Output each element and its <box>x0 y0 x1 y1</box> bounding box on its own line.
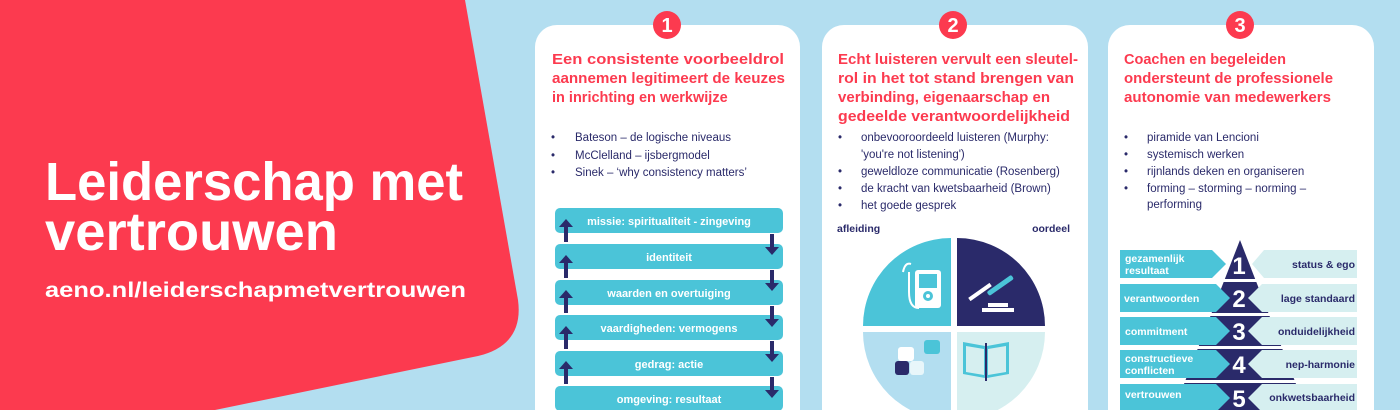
chart: Lencioni pyramid: onduidelijkheid <box>1278 326 1355 338</box>
chart: logical levels: gedrag: actie <box>635 359 703 371</box>
panel: card 1 <box>535 11 800 410</box>
heading 1: in inrichting en werkwijze <box>552 90 728 106</box>
heading 2: Echt luisteren vervult een sleutel- <box>838 52 1078 68</box>
chart: Lencioni pyramid: lage standaard <box>1281 293 1355 305</box>
bullets 1: Sinek – ‘why consistency matters’ <box>575 167 747 179</box>
number badge 3: 3 <box>1234 15 1246 37</box>
bullets 2: 'you're not listening') <box>861 149 965 161</box>
bullets 1: • <box>551 132 555 144</box>
number badge 2: 2 <box>947 15 959 37</box>
bullets 3: forming – storming – norming – <box>1147 183 1307 195</box>
bullets 2: het goede gesprek <box>861 200 957 212</box>
chart: Lencioni pyramid: status & ego <box>1292 259 1355 271</box>
chart: quadrant circle <box>863 238 1045 410</box>
bullets 3: systemisch werken <box>1147 149 1244 161</box>
chart: Lencioni pyramid <box>1120 240 1357 410</box>
chart: logical levels: missie: spiritualiteit - zingeving <box>587 216 751 228</box>
chart: Lencioni pyramid: commitment <box>1125 326 1188 338</box>
heading 2: verbinding, eigenaarschap en <box>838 90 1050 106</box>
chart: logical levels: waarden en overtuiging <box>606 288 731 300</box>
url: aeno.nl/leiderschapmetvertrouwen <box>45 279 466 302</box>
bullets 3: • <box>1124 183 1128 195</box>
chart: Lencioni pyramid: vertrouwen <box>1125 389 1182 401</box>
bullets 2: • <box>838 200 842 212</box>
chart: Lencioni pyramid: onkwetsbaarheid <box>1269 392 1355 404</box>
number badge 2 <box>939 11 967 39</box>
title <box>45 161 462 250</box>
chart: Lencioni pyramid: 1 <box>1232 253 1246 280</box>
bullets 2: • <box>838 183 842 195</box>
chart: Lencioni pyramid: constructieve <box>1125 353 1193 365</box>
bullets 3: • <box>1124 132 1128 144</box>
labels afleiding / oordeel <box>837 224 1070 234</box>
heading 2: gedeelde verantwoordelijkheid <box>838 109 1070 125</box>
number badge 3 <box>1226 11 1254 39</box>
bullets 1: Bateson – de logische niveaus <box>575 132 731 144</box>
chart: Lencioni pyramid: nep-harmonie <box>1286 359 1355 371</box>
bullets 3: performing <box>1147 199 1202 211</box>
chart: Lencioni pyramid: 3 <box>1232 319 1246 346</box>
chart: Lencioni pyramid: verantwoorden <box>1124 293 1199 305</box>
bullets 2 <box>838 132 1060 212</box>
heading 3 <box>1124 52 1333 106</box>
bullets 1: McClelland – ijsbergmodel <box>575 150 710 162</box>
heading 3: ondersteunt de professionele <box>1124 71 1333 87</box>
chart: Lencioni pyramid: conflicten <box>1125 365 1175 377</box>
title: vertrouwen <box>45 202 338 262</box>
bullets 3 <box>1124 132 1307 211</box>
bullets 1 <box>551 132 747 179</box>
bullets 1: • <box>551 150 555 162</box>
bullets 1: • <box>551 167 555 179</box>
chart: Lencioni pyramid: resultaat <box>1125 265 1169 277</box>
heading 2: rol in het tot stand brengen van <box>838 71 1074 87</box>
chart: Lencioni pyramid: gezamenlijk <box>1125 253 1185 265</box>
bullets 3: • <box>1124 166 1128 178</box>
icon: open book <box>963 342 1009 381</box>
chart: logical levels <box>555 208 783 410</box>
bullets 3: rijnlands deken en organiseren <box>1147 166 1304 178</box>
bullets 2: • <box>838 166 842 178</box>
bullets 2: geweldloze communicatie (Rosenberg) <box>861 166 1060 178</box>
title: Leiderschap met <box>45 152 463 212</box>
bullets 2: • <box>838 132 842 144</box>
chart: logical levels: vaardigheden: vermogens <box>601 323 737 335</box>
icon: puzzle pieces <box>895 340 940 375</box>
icon: music player <box>903 264 941 308</box>
chart: logical levels: identiteit <box>646 252 692 264</box>
heading 3: Coachen en begeleiden <box>1124 52 1286 68</box>
heading 1: Een consistente voorbeeldrol <box>552 52 784 68</box>
chart: Lencioni pyramid: 2 <box>1232 286 1246 313</box>
chart: logical levels: omgeving: resultaat <box>617 394 722 406</box>
panel: card 2 <box>822 11 1088 410</box>
chart: Lencioni pyramid: 4 <box>1232 352 1246 379</box>
labels afleiding / oordeel: oordeel <box>1032 223 1070 235</box>
labels afleiding / oordeel: afleiding <box>837 223 880 235</box>
bullets 2: de kracht van kwetsbaarheid (Brown) <box>861 183 1051 195</box>
number badge 1 <box>653 11 681 39</box>
bullets 2: onbevooroordeeld luisteren (Murphy: <box>861 132 1049 144</box>
bullets 3: • <box>1124 149 1128 161</box>
panel: card 3 <box>1108 11 1374 410</box>
icon: gavel <box>968 275 1014 312</box>
heading 1 <box>552 52 785 106</box>
number badge 1: 1 <box>661 15 673 37</box>
bullets 3: piramide van Lencioni <box>1147 132 1259 144</box>
heading 1: aannemen legitimeert de keuzes <box>552 71 785 87</box>
heading 2 <box>838 52 1078 125</box>
red title panel <box>0 0 519 410</box>
heading 3: autonomie van medewerkers <box>1124 90 1331 106</box>
